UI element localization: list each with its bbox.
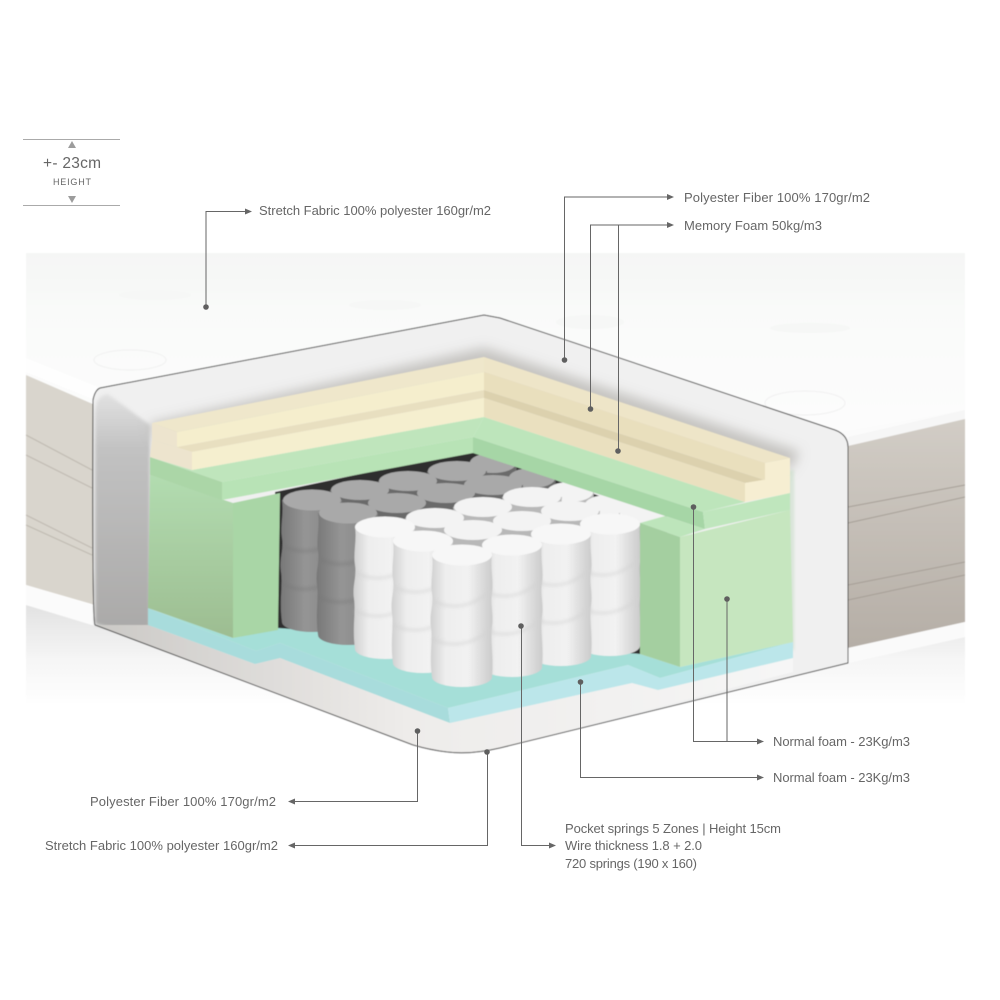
blue base foam	[148, 608, 793, 723]
callout: normal foam green: Normal foam - 23Kg/m3	[773, 734, 910, 749]
callout: memory foam	[588, 218, 822, 454]
green top slab	[150, 417, 790, 529]
floor shadow	[26, 605, 965, 790]
callout: polyester fiber top: Polyester Fiber 100% 170gr/m2	[684, 190, 870, 205]
front white springs	[354, 514, 641, 687]
callout: memory foam: Memory Foam 50kg/m3	[684, 218, 822, 233]
height indicator	[23, 140, 120, 206]
front grey springs	[281, 490, 379, 645]
polyester fiber cut section	[93, 315, 848, 753]
height indicator: HEIGHT	[53, 177, 92, 187]
green foam	[148, 417, 793, 667]
memory foam layers	[150, 357, 790, 502]
callout: polyester fiber bottom: Polyester Fiber 100% 170gr/m2	[90, 794, 276, 809]
mattress photograph	[26, 253, 965, 790]
green right block	[640, 510, 793, 667]
lower memory foam	[150, 390, 790, 502]
callout: pocket springs: Pocket springs 5 Zones | Height 15cm	[565, 821, 781, 836]
callout: normal foam blue	[578, 679, 910, 785]
callout: stretch fabric bottom: Stretch Fabric 100% polyester 160gr/m2	[45, 838, 278, 853]
callout: stretch fabric top: Stretch Fabric 100% polyester 160gr/m2	[259, 203, 491, 218]
right side fabric	[848, 410, 965, 663]
callout: stretch fabric top	[203, 203, 491, 310]
callout: stretch fabric bottom	[45, 749, 490, 853]
back row grey springs	[329, 453, 556, 635]
callout: polyester fiber top	[562, 190, 870, 363]
green left block	[148, 475, 280, 638]
height indicator: +- 23cm	[43, 155, 101, 172]
callout: normal foam blue: Normal foam - 23Kg/m3	[773, 770, 910, 785]
callout: pocket springs: 720 springs (190 x 160)	[565, 856, 697, 871]
mattress top surface	[26, 253, 965, 447]
upper memory foam	[152, 357, 790, 480]
pocket springs	[281, 453, 667, 687]
callout: pocket springs	[518, 623, 781, 871]
rear white springs	[404, 482, 667, 662]
cavity behind springs	[275, 450, 660, 654]
callout: polyester fiber bottom	[90, 728, 420, 809]
callout: normal foam green	[691, 504, 910, 749]
left side fabric	[26, 375, 95, 626]
callout: pocket springs: Wire thickness 1.8 + 2.0	[565, 838, 702, 853]
